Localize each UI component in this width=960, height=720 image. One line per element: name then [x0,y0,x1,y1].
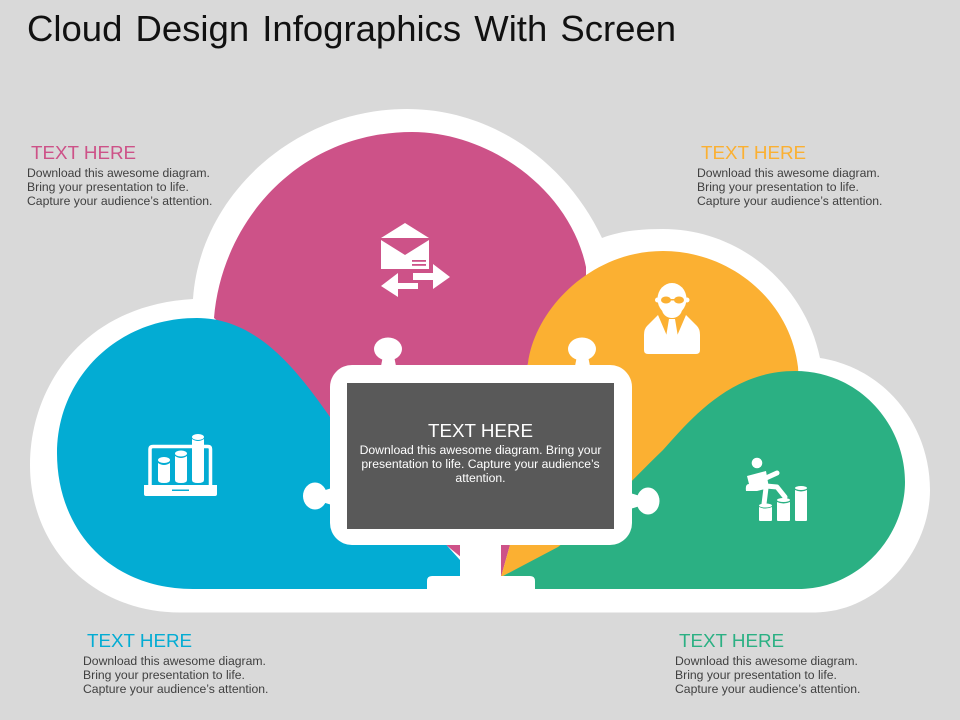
text block: bottom left: Download this awesome diagram. [83,654,266,668]
pink segment [214,132,586,589]
text block: top right [697,142,882,208]
text block: top right: TEXT HERE [701,142,806,163]
text block: bottom left: Capture your audience’s attention. [83,682,268,696]
text block: top left: Download this awesome diagram. [27,166,210,180]
text block: bottom right [675,630,860,696]
text block: top left: Bring your presentation to life. [27,180,189,194]
text block: bottom right: Capture your audience’s attention. [675,682,860,696]
icon: climbing figure on bars [746,458,807,521]
monitor screen [347,383,614,529]
text block: bottom right: Download this awesome diagram. [675,654,858,668]
yellow segment [501,251,800,577]
blue segment [57,318,500,589]
icon: businessman [644,283,700,354]
cloud outline [30,109,930,612]
monitor stand [427,540,535,589]
text block: top right: Capture your audience’s attention. [697,194,882,208]
screen text: Download this awesome diagram. Bring your [360,443,601,457]
screen text: TEXT HERE [428,420,533,441]
text block: bottom right: TEXT HERE [679,630,784,651]
title: Cloud Design Infographics With Screen [27,8,676,49]
text block: bottom left: Bring your presentation to life. [83,668,245,682]
text block: top left: Capture your audience’s attention. [27,194,212,208]
icon: envelope with arrows [381,223,450,297]
text block: bottom left [83,630,268,696]
monitor frame [330,365,632,545]
text block: top right: Bring your presentation to life. [697,180,859,194]
monitor knobs [303,338,660,514]
text block: bottom right: Bring your presentation to life. [675,668,837,682]
screen text: attention. [455,471,506,485]
text block: top right: Download this awesome diagram. [697,166,880,180]
icon: laptop with bars [144,434,217,496]
screen text: presentation to life. Capture your audience’s [361,457,600,471]
monitor [303,338,660,589]
green segment [501,371,905,589]
text block: top left [27,142,212,208]
screen text [360,420,602,485]
text block: bottom left: TEXT HERE [87,630,192,651]
text block: top left: TEXT HERE [31,142,136,163]
